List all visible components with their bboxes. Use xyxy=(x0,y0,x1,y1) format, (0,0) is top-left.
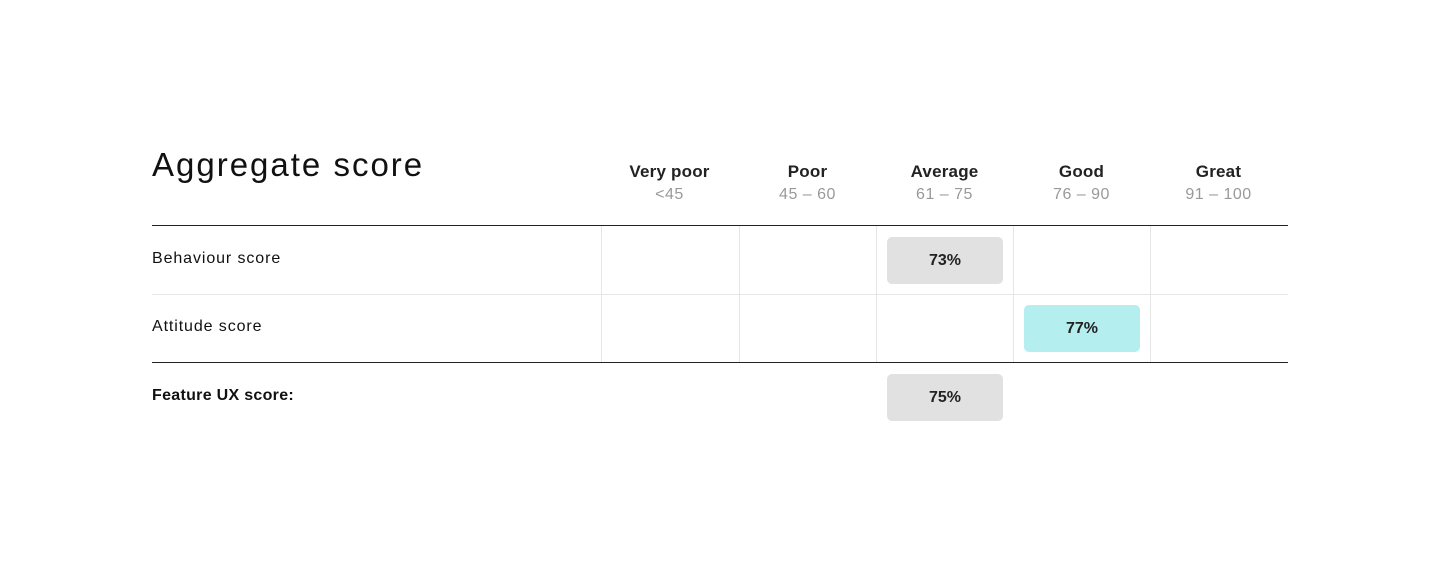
row label: attitude: Attitude score xyxy=(152,318,262,335)
column headers: Good xyxy=(1059,162,1104,181)
column headers: Great xyxy=(1196,162,1241,181)
badge: 75% xyxy=(887,374,1003,421)
column headers: 76 – 90 xyxy=(1053,186,1110,203)
row label: feature UX: Feature UX score: xyxy=(152,387,294,404)
column headers: 91 – 100 xyxy=(1185,186,1252,203)
column headers: Poor xyxy=(788,162,827,181)
badge: 73% xyxy=(887,237,1003,284)
badge: 77%: 77% xyxy=(1066,320,1098,336)
column headers: Very poor xyxy=(629,162,710,181)
title: Aggregate score xyxy=(152,146,424,183)
column headers: 45 – 60 xyxy=(779,186,836,203)
badge: 77% xyxy=(1024,305,1140,352)
column headers: <45 xyxy=(655,186,684,203)
column headers xyxy=(629,162,1252,203)
row label: behaviour: Behaviour score xyxy=(152,250,281,267)
badge: 75%: 75% xyxy=(929,388,961,406)
column headers: Average xyxy=(911,162,978,181)
badge: 73%: 73% xyxy=(929,252,961,268)
column headers: 61 – 75 xyxy=(916,186,973,203)
